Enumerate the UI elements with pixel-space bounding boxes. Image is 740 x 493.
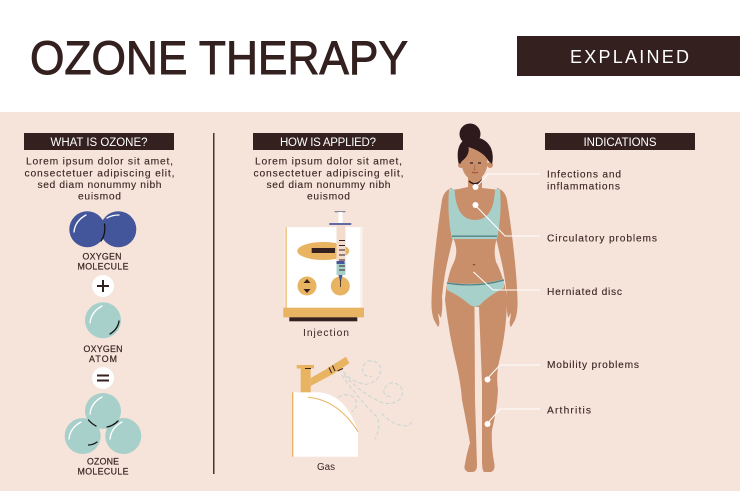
label: infections and inflammations: inflammations xyxy=(547,182,620,192)
hair xyxy=(458,124,493,164)
banner: explained xyxy=(517,36,740,76)
label: oxygen molecule: OXYGEN xyxy=(82,252,122,262)
face details xyxy=(470,162,481,164)
label: infections and inflammations: Infections and xyxy=(547,170,621,180)
text block: application description: euismod xyxy=(307,192,350,202)
heading: how is applied: HOW IS APPLIED? xyxy=(280,137,376,149)
label: gas: Gas xyxy=(317,462,335,473)
icon: plus xyxy=(92,275,114,297)
callout lines and dots xyxy=(472,174,540,427)
label: arthritis: Arthritis xyxy=(547,406,591,416)
text block: ozone description: euismod xyxy=(78,192,121,202)
title: OZONE THERAPY xyxy=(30,31,408,84)
panel: what is ozone xyxy=(24,133,174,476)
label: mobility problems: Mobility problems xyxy=(547,360,639,371)
label: infections and inflammations xyxy=(547,170,621,192)
panel: how is applied xyxy=(253,133,413,473)
text block: application description: sed diam nonummy nibh xyxy=(266,180,391,191)
heading: indications: INDICATIONS xyxy=(584,137,657,149)
torso and legs xyxy=(445,172,507,472)
icon: gas swirls xyxy=(338,361,413,439)
banner: explained: EXPLAINED xyxy=(570,47,689,67)
text block: ozone description xyxy=(24,156,174,202)
heading: what is ozone xyxy=(24,133,174,150)
text block: application description: Lorem ipsum dolor sit amet, xyxy=(255,156,402,168)
panel: indications xyxy=(545,133,695,416)
label: oxygen atom: OXYGEN xyxy=(84,344,122,354)
top xyxy=(448,189,501,239)
label: injection: Injection xyxy=(303,328,349,339)
right arm xyxy=(496,188,518,327)
divider xyxy=(213,133,214,474)
text block: ozone description: consectetuer adipiscing elit, xyxy=(24,168,174,180)
heading: indications xyxy=(545,133,695,150)
figure: human body xyxy=(431,124,518,472)
left arm xyxy=(431,188,453,327)
panel: what is ozone: MOLECULE xyxy=(78,262,129,272)
label: ozone molecule: OZONE xyxy=(87,456,119,466)
label: herniated disc: Herniated disc xyxy=(547,287,622,298)
briefs xyxy=(447,279,504,307)
text block: ozone description: sed diam nonummy nibh xyxy=(38,180,162,191)
icon: injection machine xyxy=(283,211,364,321)
label: circulatory problems: Circulatory problems xyxy=(547,234,657,244)
heading: what is ozone: WHAT IS OZONE? xyxy=(50,137,148,149)
icon: syringe xyxy=(329,211,351,287)
panel: what is ozone: ATOM xyxy=(89,354,117,364)
icon: ozone molecule xyxy=(65,393,141,454)
icon: equals xyxy=(92,367,114,389)
icon: oxygen molecule xyxy=(69,211,136,247)
heading: how is applied xyxy=(253,133,403,150)
text block: application description: consectetuer adipiscing elit, xyxy=(254,168,404,180)
icon: gas cylinder xyxy=(292,357,358,457)
icon: oxygen atom xyxy=(85,302,121,338)
panel: background xyxy=(0,112,740,491)
panel: what is ozone: MOLECULE xyxy=(78,466,129,476)
text block: ozone description: Lorem ipsum dolor sit amet, xyxy=(26,156,173,168)
ears and face xyxy=(458,144,493,180)
text block: application description xyxy=(254,156,404,202)
